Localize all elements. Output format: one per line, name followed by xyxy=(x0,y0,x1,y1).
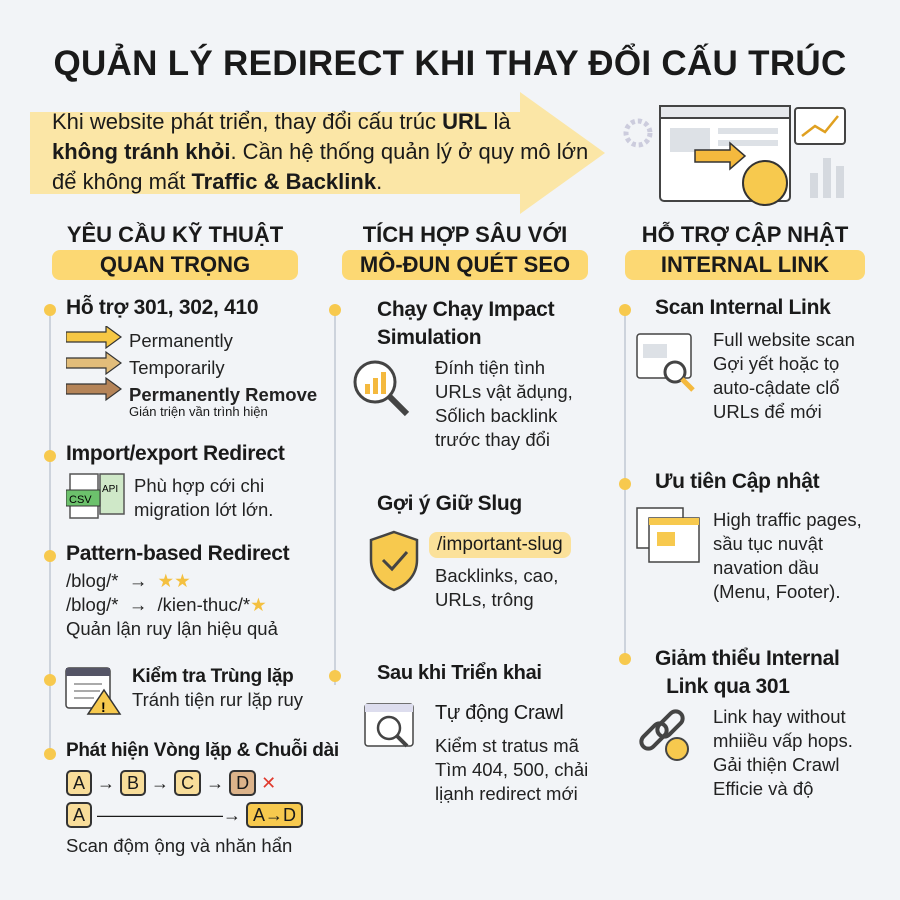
col1 item: pattern-based: /blog/* → /kien-thuc/*★ xyxy=(66,594,267,615)
text: Efficie và độ xyxy=(713,778,813,799)
text: URLs để mới xyxy=(713,401,822,422)
column header 2 xyxy=(342,222,588,280)
col3 item: reduce 301: Link qua 301 xyxy=(666,675,790,698)
text: Full website scan xyxy=(713,329,855,350)
col1 item: loops and chains: Scan độm ộng và nhăn hẩn xyxy=(66,835,292,856)
col1 item: import/export xyxy=(44,442,285,520)
col1 item: loops and chains: Phát hiện Vòng lặp & Chuỗi dài xyxy=(66,740,339,761)
text: Temporarily xyxy=(129,357,225,378)
col1 item: loops and chains: → → → ✕ xyxy=(97,773,276,793)
column header 1 xyxy=(52,222,298,280)
text: Kiểm st tratus mã xyxy=(435,735,579,756)
text: Permanently xyxy=(129,330,233,351)
text: migration lớt lớn. xyxy=(134,499,273,520)
column header 3 xyxy=(625,222,865,280)
text: API xyxy=(102,484,118,495)
title: QUẢN LÝ REDIRECT KHI THAY ĐỔI CẤU TRÚC xyxy=(53,44,847,83)
text: Link hay without xyxy=(713,706,846,727)
col1 item: loops and chains xyxy=(44,738,339,856)
intro text xyxy=(52,109,588,194)
col3 item: scan internal link xyxy=(619,296,855,422)
col1 item: duplicates: Tránh tiện rur lặp ruy xyxy=(132,689,303,710)
col1 item: pattern-based: Quản lận ruy lận hiệu quả xyxy=(66,618,278,639)
text: auto-cậdate clổ xyxy=(713,377,840,398)
col2 item: impact simulation xyxy=(329,298,573,450)
column header 1: QUAN TRỌNG xyxy=(100,252,250,277)
text: Sốlich backlink xyxy=(435,405,557,426)
illustration: browser with chart xyxy=(624,105,846,206)
text: Permanently Remove xyxy=(129,384,317,405)
column header 3: INTERNAL LINK xyxy=(661,252,829,277)
col1 item: loops and chains: D xyxy=(236,773,249,793)
col1 item: loops and chains: A xyxy=(73,773,85,793)
intro arrow background xyxy=(30,92,605,214)
text: High traffic pages, xyxy=(713,509,862,530)
text: Gợi yết hoặc tọ xyxy=(713,353,839,374)
text: Đính tiện tình xyxy=(435,357,545,378)
text: /important-slug xyxy=(437,534,563,555)
column header 2: MÔ-ĐUN QUÉT SEO xyxy=(360,252,570,277)
text: Gải thiện Crawl xyxy=(713,754,839,775)
col1 item: 301 302 410 xyxy=(44,294,317,419)
col3 item: priority update: Ưu tiên Cập nhật xyxy=(655,470,819,493)
col1 item: duplicates xyxy=(44,666,303,715)
col1 item: pattern-based xyxy=(44,542,290,639)
text: Gián triện vần trình hiện xyxy=(129,404,268,419)
col2 item: impact simulation: Simulation xyxy=(377,326,481,349)
text: Backlinks, cao, xyxy=(435,565,558,586)
col3 item: priority update xyxy=(619,470,862,602)
text: URLs, trông xyxy=(435,589,534,610)
text: Tìm 404, 500, chải xyxy=(435,759,588,780)
col1 item: loops and chains: C xyxy=(181,773,194,793)
col1 item: loops and chains: A xyxy=(73,805,85,825)
text: Tự động Crawl xyxy=(435,702,563,724)
col1 item: 301 302 410: Hỗ trợ 301, 302, 410 xyxy=(66,296,258,319)
col1 item: duplicates: Kiểm tra Trùng lặp xyxy=(132,666,293,687)
intro text: để không mất Traffic & Backlink. xyxy=(52,169,382,194)
text: sầu tục nuvật xyxy=(713,533,823,554)
intro text: Khi website phát triển, thay đổi cấu trúc URL là xyxy=(52,109,511,134)
column header 3: HỖ TRỢ CẬP NHẬT xyxy=(642,222,848,247)
text: URLs vật ădụng, xyxy=(435,381,573,402)
column header 2: TÍCH HỢP SÂU VỚI xyxy=(363,222,567,247)
text: CSV xyxy=(69,494,92,506)
col1 item: loops and chains: A→D xyxy=(253,805,296,825)
text: Phù hợp cới chi xyxy=(134,475,264,496)
col3 item: reduce 301: Giảm thiểu Internal xyxy=(655,647,840,670)
text: mhiiều vấp hops. xyxy=(713,730,853,751)
col2 item: after deploy: Sau khi Triển khai xyxy=(377,662,542,684)
col2 item: after deploy xyxy=(329,662,588,804)
text: trước thay đổi xyxy=(435,429,550,450)
col2 item: keep slug xyxy=(370,492,571,610)
col3 item: reduce 301 xyxy=(619,647,853,799)
col2 item: keep slug: Gợi ý Giữ Slug xyxy=(377,492,522,515)
col1 item: loops and chains: ———————→ xyxy=(97,805,241,825)
col1 item: loops and chains: B xyxy=(127,773,139,793)
column header 1: YÊU CẦU KỸ THUẬT xyxy=(67,222,283,247)
text: (Menu, Footer). xyxy=(713,581,840,602)
text: lịạnh redirect mới xyxy=(435,783,578,804)
intro text: không tránh khỏi. Cần hệ thống quản lý ở quy mô lớn xyxy=(52,139,588,164)
col1 item: pattern-based: Pattern-based Redirect xyxy=(66,542,289,565)
text: navation dầu xyxy=(713,557,819,578)
col2 item: impact simulation: Chạy Chạy Impact xyxy=(377,298,554,321)
col3 item: scan internal link: Scan Internal Link xyxy=(655,296,830,319)
col1 item: duplicates: ! xyxy=(101,699,106,715)
col1 item: import/export: Import/export Redirect xyxy=(66,442,285,465)
col1 item: pattern-based: /blog/* → ★★ xyxy=(66,570,191,591)
